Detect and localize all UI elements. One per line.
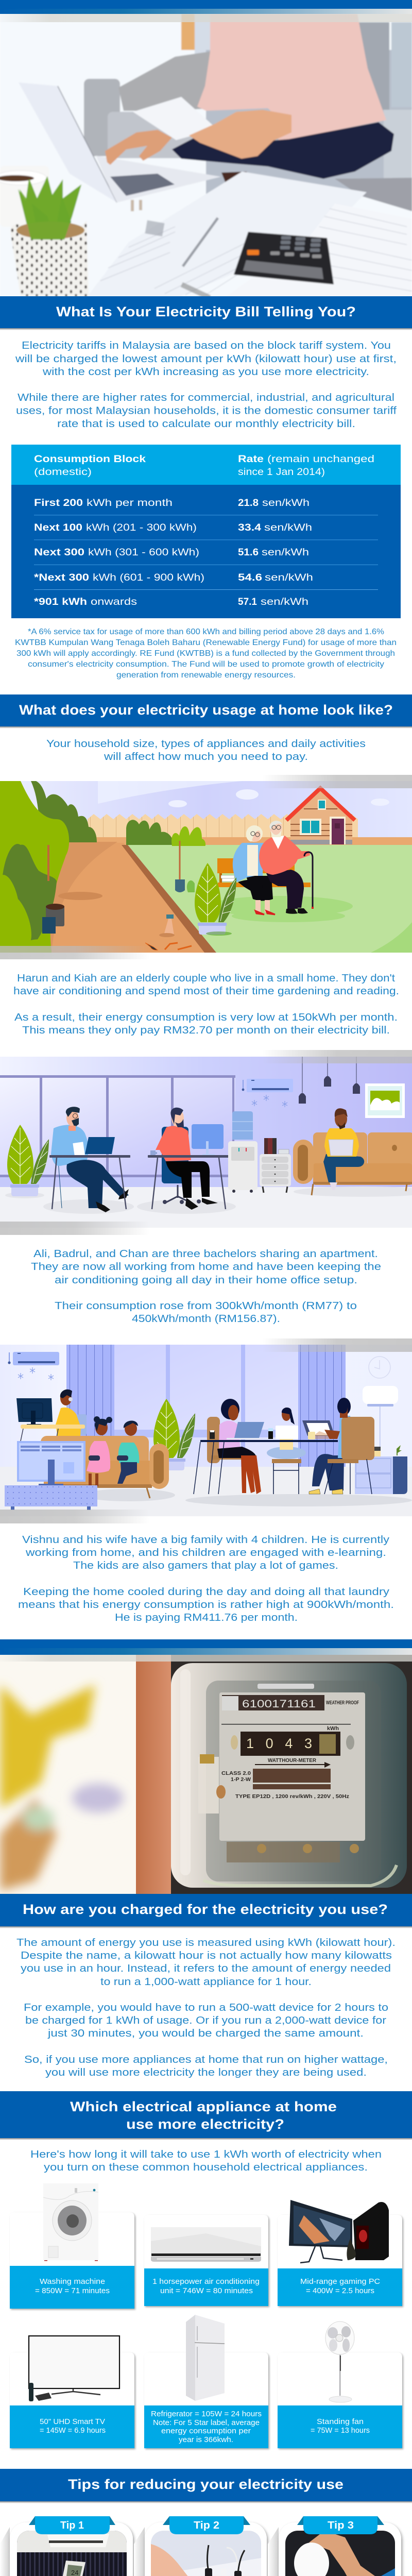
shadow strips for scene 1 <box>0 775 412 959</box>
text: Harun and Kiah: As a result, their energy consumption is very low at 150kWh per month. <box>14 1011 398 1023</box>
desk 1 <box>49 1155 130 1209</box>
text: kWh explanation: So, if you use more appliances at home that run on higher wattage, <box>24 2054 388 2065</box>
hero photo: woman checking electricity bill <box>0 14 412 300</box>
table: domestic tariff rates: sen/kWh <box>264 522 312 533</box>
text: block tariff intro <box>15 340 397 430</box>
heading: What Is Your Electricity Bill Telling You?: What Is Your Electricity Bill Telling You? <box>56 304 356 319</box>
father at table and cabinet <box>302 1398 407 1494</box>
text: block tariff intro: with the cost per kWh increasing as you use more electricity. <box>42 366 369 378</box>
wall AC and clock <box>8 1352 390 1380</box>
text: Ali, Badrul and Chan: 450kWh/month (RM156.87). <box>132 1313 280 1325</box>
text: household intro: Your household size, types of appliances and daily activities <box>46 738 366 750</box>
card: air conditioning unit <box>144 2215 268 2306</box>
family sofa and kids <box>41 1416 169 1498</box>
tab: Tip 1 <box>29 2516 115 2534</box>
card: air conditioning unit: unit = 746W = 80 minutes <box>160 2287 253 2295</box>
text: Ali, Badrul and Chan: Ali, Badrul, and Chan are three bachelors sharing an apartment. <box>33 1248 378 1260</box>
wall picture <box>365 1083 405 1118</box>
footnote: service tax and RE fund: 300 kWh will apply accordingly. RE Fund (KWTBB) is a fund collected by the Government through <box>16 649 395 658</box>
text: kWh explanation: Despite the name, a kilowatt hour is not actually how many kilowatts <box>21 1950 392 1961</box>
text: Harun and Kiah <box>13 972 399 1036</box>
text: kWh explanation: be charged for 1 kWh of usage. Or if you run a 2,000-watt device for <box>25 2014 386 2026</box>
card: standing fan: Standing fan <box>317 2418 364 2426</box>
text: kWh explanation: to run a 1,000-watt appliance for 1 hour. <box>100 1976 312 1988</box>
table: domestic tariff rates: *Next 300 <box>34 572 89 583</box>
text: household intro <box>46 738 366 762</box>
text: Ali, Badrul and Chan: They are now all working from home and have been keeping the <box>31 1261 381 1273</box>
card: standing fan: = 75W = 13 hours <box>311 2427 370 2435</box>
table: domestic tariff rates: 57.1 <box>238 596 257 607</box>
table: domestic tariff rates: *901 kWh <box>34 596 87 607</box>
photo: air-con remote <box>17 2531 127 2576</box>
heading: Tips for reducing your electricity use: Tips for reducing your electricity use <box>68 2477 344 2492</box>
icon: air conditioner <box>151 2227 261 2262</box>
card: refrigerator: year is 366kwh. <box>179 2436 233 2444</box>
path <box>46 842 206 953</box>
card: smart TV: = 145W = 6.9 hours <box>40 2427 106 2435</box>
photo: electricity meter: kWh <box>327 1726 339 1732</box>
heading: Which electrical appliance at home use more electricity? <box>0 2091 412 2140</box>
text: kWh explanation: just 30 minutes, you would be charged the same amount. <box>47 2027 364 2039</box>
sofa with man 3 <box>293 1108 412 1195</box>
tab: Tip 2 <box>163 2516 250 2534</box>
heading: How are you charged for the electricity you use?: How are you charged for the electricity you use? <box>23 1902 388 1917</box>
text: Ali, Badrul and Chan <box>31 1248 381 1325</box>
text: kWh explanation: The amount of energy you use is measured using kWh (kilowatt hour). <box>16 1937 396 1948</box>
water dispenser <box>228 1111 258 1193</box>
photo: electricity meter: WEATHER PROOF <box>326 1700 359 1706</box>
footnote: service tax and RE fund <box>15 628 397 680</box>
air conditioner <box>242 1079 293 1107</box>
table: domestic tariff rates: 51.6 <box>238 547 259 558</box>
text: Vishnu's family: The kids are also gamers that play a lot of games. <box>73 1560 338 1571</box>
cane <box>304 852 313 907</box>
photo: power strip <box>151 2531 261 2576</box>
house <box>286 788 355 844</box>
drawer cabinet with binders <box>260 1138 291 1193</box>
text: kWh explanation: you will use more electricity the longer they are being used. <box>45 2066 367 2078</box>
footnote: service tax and RE fund: consumer's electricity consumption. The Fund will be used to promote growth of electricity <box>28 660 384 669</box>
tip card 3: LED bulbs <box>268 2516 401 2576</box>
text: kWh explanation: For example, you would have to run a 500-watt device for 2 hours to <box>24 2002 388 2013</box>
text: block tariff intro: will be charged the lowest amount per kWh (kilowatt hour) use at first, <box>15 353 397 365</box>
icon: gaming PC and monitor <box>289 2200 389 2263</box>
card: smart TV <box>10 2336 134 2448</box>
table: domestic tariff rates: sen/kWh <box>261 596 308 607</box>
TV and TV unit <box>5 1441 97 1510</box>
text: appliances intro <box>30 2148 382 2173</box>
tab: Tip 2: Tip 2 <box>194 2520 219 2531</box>
text: block tariff intro: uses, for most Malaysian households, it is the domestic consumer tariff <box>16 405 397 416</box>
text: Vishnu's family: working from home, and his children are engaged with e-learning. <box>25 1547 386 1558</box>
table: domestic tariff rates: 54.6 <box>238 572 262 583</box>
card: refrigerator <box>144 2315 268 2448</box>
top blue band <box>0 0 412 22</box>
heading: Which electrical appliance at home use more electricity?: use more electricity? <box>126 2116 284 2132</box>
card: standing fan <box>278 2321 402 2448</box>
gaming desk and boy <box>16 1389 87 1441</box>
table: domestic tariff rates: Consumption Block <box>34 453 146 465</box>
text: Ali, Badrul and Chan: Their consumption rose from 300kWh/month (RM77) to <box>55 1300 357 1312</box>
card: refrigerator: Refrigerator = 105W = 24 hours <box>151 2410 262 2418</box>
photo: electricity meter: WATTHOUR-METER <box>268 1758 317 1764</box>
text: household intro: will affect how much you need to pay. <box>104 751 308 762</box>
text: Vishnu's family <box>18 1534 394 1623</box>
table: domestic tariff rates: kWh (601 - 900 kWh) <box>93 572 204 583</box>
card: gaming PC: Mid-range gaming PC <box>300 2278 380 2286</box>
icon: standing fan <box>325 2321 354 2402</box>
table: domestic tariff rates: Next 300 <box>34 547 84 558</box>
card: gaming PC: = 400W = 2.5 hours <box>306 2287 374 2295</box>
table: domestic tariff rates: since 1 Jan 2014) <box>238 466 325 478</box>
text: Harun and Kiah: have air conditioning and spend most of their time gardening and reading. <box>13 985 399 997</box>
floor lamp <box>363 1386 398 1447</box>
text: Vishnu's family: means that his energy consumption is rather high at 900kWh/month. <box>18 1599 394 1611</box>
illustration: three bachelors in home office <box>0 1057 412 1228</box>
icon: washing machine <box>43 2183 98 2261</box>
table: domestic tariff rates: sen/kWh <box>265 572 313 583</box>
pendant lamps <box>299 1057 360 1104</box>
text: Harun and Kiah: Harun and Kiah are an elderly couple who live in a small home. They don't <box>17 972 395 984</box>
footnote: service tax and RE fund: *A 6% service tax for usage of more than 600 kWh and billing period above 28 days and 1.6% <box>28 628 384 636</box>
tab: Tip 3 <box>297 2516 384 2534</box>
text: block tariff intro: While there are higher rates for commercial, industrial, and agricultural <box>18 392 394 403</box>
shadow strips for scene 2 <box>0 1050 412 1235</box>
illustration: elderly couple in garden <box>0 781 412 953</box>
meter reading digits: 1043 <box>246 1736 312 1751</box>
spray bottle and tools <box>164 919 174 935</box>
heading: What does your electricity usage at home look like?: What does your electricity usage at home look like? <box>19 702 393 718</box>
fence <box>88 814 358 837</box>
text: appliances intro: Here's how long it will take to use 1 kWh worth of electricity when <box>30 2148 382 2160</box>
table: domestic tariff rates: onwards <box>91 596 137 607</box>
table: domestic tariff rates: First 200 <box>34 497 83 509</box>
man 1 with laptop <box>51 1107 129 1212</box>
text: Ali, Badrul and Chan: air conditioning going all day in their home office setup. <box>55 1274 357 1286</box>
desk 2 <box>148 1155 230 1209</box>
text: Vishnu's family: Keeping the home cooled during the day and doing all that laundry <box>23 1586 390 1598</box>
photo: electricity meter: TYPE EP12D , 1200 rev/kWh , 220V , 50Hz <box>235 1794 349 1800</box>
table: domestic tariff rates: 21.8 <box>238 497 259 509</box>
grandmother <box>233 825 275 914</box>
card: refrigerator: Note: For 5 Star label, average <box>153 2419 260 2427</box>
card: air conditioning unit: 1 horsepower air conditioning <box>152 2278 260 2286</box>
text: block tariff intro: Electricity tariffs in Malaysia are based on the block tariff system. You <box>22 340 391 351</box>
tab: Tip 1: Tip 1 <box>60 2520 84 2531</box>
heading: What does your electricity usage at home look like? <box>0 694 412 728</box>
table: domestic tariff rates: kWh per month <box>87 497 173 509</box>
bench <box>217 858 295 873</box>
tab: Tip 3: Tip 3 <box>328 2520 354 2531</box>
table: domestic tariff rates: Rate <box>238 453 264 465</box>
man 2 at monitor <box>150 1108 224 1210</box>
back bushes <box>126 820 174 845</box>
photo: LED bulb in hand <box>285 2531 395 2576</box>
heading: Which electrical appliance at home use more electricity?: Which electrical appliance at home <box>70 2099 337 2114</box>
text: appliances intro: you turn on these common household electrical appliances. <box>44 2161 368 2173</box>
icon: refrigerator <box>186 2315 225 2401</box>
meter serial number: 6100171161 <box>242 1698 316 1710</box>
table: domestic tariff rates: Next 100 <box>34 522 82 533</box>
illustration: big family at home <box>0 1345 412 1516</box>
text: Vishnu's family: He is paying RM411.76 per month. <box>115 1612 298 1623</box>
photo: electricity meter <box>0 1655 412 1894</box>
photo: electricity meter: CLASS 2.0 <box>221 1771 251 1776</box>
card: gaming PC <box>278 2200 402 2306</box>
text: Harun and Kiah: This means they only pay RM32.70 per month on their electricity bill. <box>22 1024 390 1036</box>
text: Vishnu's family: Vishnu and his wife have a big family with 4 children. He is currently <box>22 1534 390 1546</box>
heading: Tips for reducing your electricity use <box>0 2469 412 2503</box>
meter photo top band <box>0 1639 412 1662</box>
table: domestic tariff rates: 33.4 <box>238 522 261 533</box>
photo: electricity meter: 1-P 2-W <box>231 1777 251 1783</box>
table: domestic tariff rates: kWh (201 - 300 kWh) <box>86 522 197 533</box>
icon: television <box>29 2336 119 2401</box>
table: domestic tariff rates: (domestic) <box>34 466 92 478</box>
text: block tariff intro: rate that is used to calculate our monthly electricity bill. <box>57 418 355 430</box>
card: smart TV: 50" UHD Smart TV <box>40 2418 105 2426</box>
dining table with mother and daughter <box>194 1399 338 1494</box>
tip card 1: air con timer <box>0 2516 133 2576</box>
table: domestic tariff rates <box>11 445 401 618</box>
footnote: service tax and RE fund: generation from renewable energy resources. <box>116 671 296 680</box>
card: washing machine: Washing machine <box>40 2278 105 2286</box>
table: domestic tariff rates: (remain unchanged <box>267 453 374 465</box>
card: washing machine: = 850W = 71 minutes <box>35 2287 110 2295</box>
table: domestic tariff rates: sen/kWh <box>262 547 309 558</box>
table: domestic tariff rates: kWh (301 - 600 kWh) <box>88 547 199 558</box>
footnote: service tax and RE fund: KWTBB Kumpulan Wang Tenaga Boleh Baharu (Renewable Energy Fund) for usage of more than <box>15 638 397 647</box>
shadow strips for scene 3 <box>0 1338 412 1523</box>
text: kWh explanation <box>16 1937 396 2078</box>
heading: What Is Your Electricity Bill Telling You? <box>0 296 412 330</box>
heading: How are you charged for the electricity you use? <box>0 1894 412 1928</box>
grandfather <box>259 821 310 914</box>
tip card 2: switch off power <box>134 2516 267 2576</box>
table: domestic tariff rates: sen/kWh <box>262 497 310 509</box>
card: washing machine <box>10 2183 134 2309</box>
text: kWh explanation: you use in an hour. Instead, it refers to the amount of energy needed <box>21 1962 391 1974</box>
card: refrigerator: energy consumption per <box>161 2427 251 2435</box>
left bushes <box>31 781 97 842</box>
bucket <box>46 905 64 926</box>
lawn <box>128 845 412 953</box>
